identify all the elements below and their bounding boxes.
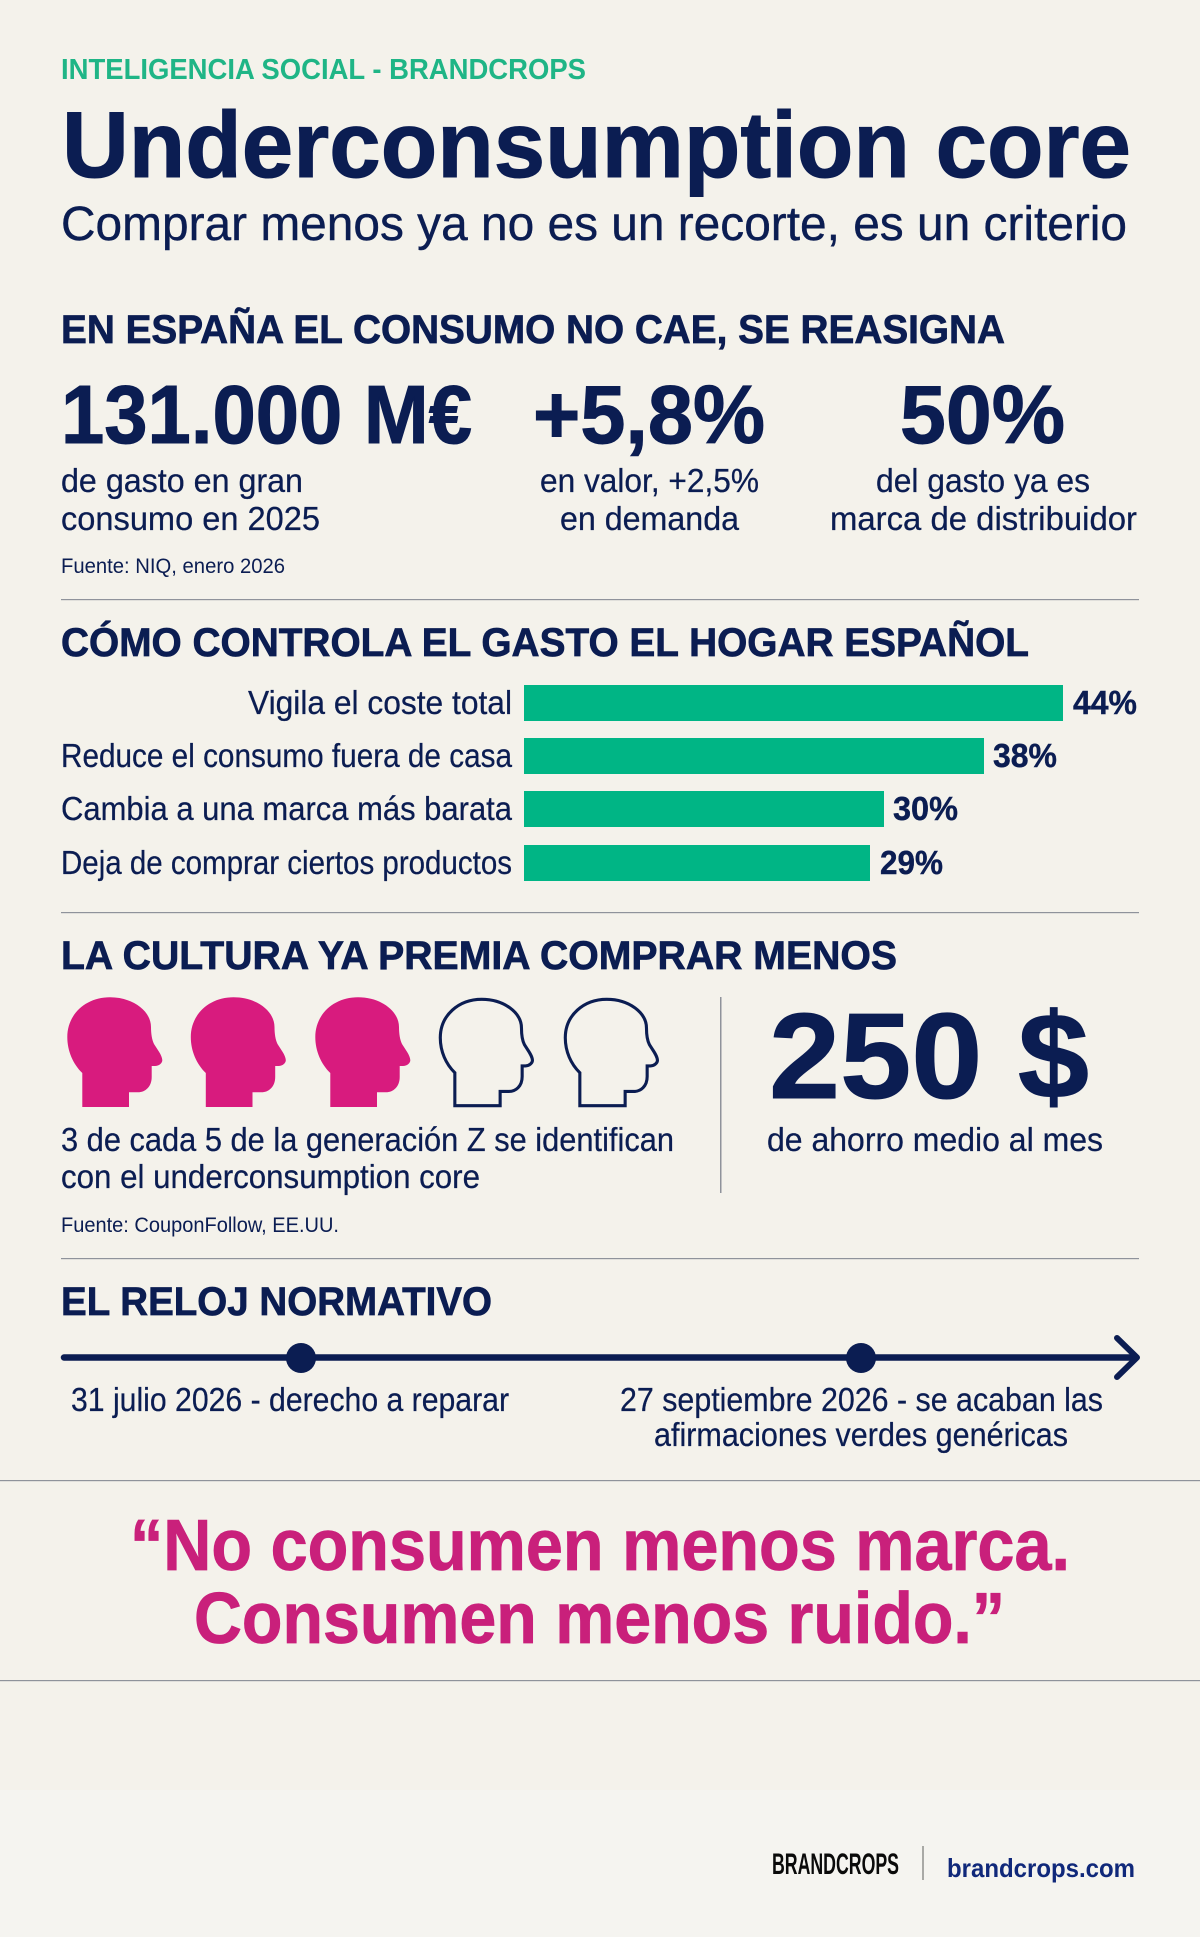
milestone: afirmaciones verdes: afirmaciones verdes genéricas bbox=[654, 1416, 1068, 1453]
icon: head outline 4 bbox=[440, 999, 532, 1106]
heading: control: CÓMO CONTROLA EL GASTO EL HOGAR ESPAÑOL bbox=[61, 619, 1029, 665]
bar: coste total: Vigila el coste total bbox=[248, 684, 512, 721]
eyebrow: INTELIGENCIA SOCIAL - BRANDCROPS bbox=[61, 54, 586, 86]
stat: valor: en demanda bbox=[560, 500, 740, 537]
bar: fuera de casa: 38% bbox=[993, 737, 1057, 774]
source: NIQ: Fuente: NIQ, enero 2026 bbox=[61, 555, 285, 578]
logo: BRANDCROPS bbox=[772, 1848, 899, 1881]
icon: head filled 3 bbox=[315, 997, 410, 1107]
bar chart bbox=[61, 684, 1137, 881]
stat: marca de distribuidor bbox=[830, 368, 1137, 537]
milestone: afirmaciones verdes: 27 septiembre 2026 - se acaban las bbox=[620, 1381, 1103, 1418]
bar: fuera de casa bbox=[61, 737, 1057, 774]
stat: valor: en valor, +2,5% bbox=[540, 462, 759, 499]
bar: dejar productos: 29% bbox=[880, 844, 943, 881]
bar: fuera de casa: Reduce el consumo fuera de casa bbox=[61, 737, 513, 774]
bar: marca más barata: 30% bbox=[893, 790, 958, 827]
icon: head outline 5 bbox=[565, 999, 657, 1106]
website: brandcrops.com bbox=[947, 1853, 1135, 1883]
stat: gasto: de gasto en gran bbox=[61, 462, 303, 499]
subtitle: Comprar menos ya no es un recorte, es un criterio bbox=[61, 198, 1127, 251]
panel: consumo en España bbox=[61, 306, 1137, 578]
footer bbox=[772, 1846, 1135, 1883]
milestone: derecho a reparar: 31 julio 2026 - derecho a reparar bbox=[71, 1381, 509, 1418]
heading: reloj: EL RELOJ NORMATIVO bbox=[61, 1280, 492, 1324]
stat: marca de distribuidor: del gasto ya es bbox=[876, 462, 1090, 499]
milestone: afirmaciones verdes bbox=[620, 1381, 1103, 1453]
panel: cultura bbox=[61, 934, 1103, 1237]
stat: valor: +5,8% bbox=[533, 368, 765, 461]
bar: dejar productos bbox=[61, 844, 943, 881]
icon: head filled 2 bbox=[191, 997, 286, 1107]
stat: valor bbox=[533, 368, 765, 537]
stat: marca de distribuidor: marca de distribuidor bbox=[830, 500, 1137, 537]
heading: cultura: LA CULTURA YA PREMIA COMPRAR MENOS bbox=[61, 934, 897, 978]
bar: marca más barata bbox=[61, 790, 958, 827]
heading: consumo: EN ESPAÑA EL CONSUMO NO CAE, SE REASIGNA bbox=[61, 306, 1005, 352]
bar: coste total: 44% bbox=[1073, 684, 1137, 721]
quote: Consumen menos ruido.” bbox=[194, 1579, 1005, 1659]
quote bbox=[130, 1506, 1070, 1659]
bar: coste total bbox=[248, 684, 1137, 721]
stat: gasto: 131.000 M€ bbox=[61, 368, 472, 461]
text: generación Z bbox=[61, 1121, 674, 1195]
text: generación Z: 3 de cada 5 de la generación Z se identifican bbox=[61, 1121, 674, 1158]
stat: marca de distribuidor: 50% bbox=[900, 368, 1065, 461]
quote: “No consumen menos marca. bbox=[130, 1506, 1070, 1586]
stat: ahorro: de ahorro medio al mes bbox=[767, 1121, 1103, 1158]
stat: gasto: consumo en 2025 bbox=[61, 500, 320, 537]
timeline arrow bbox=[64, 1338, 1137, 1377]
panel: control del gasto bbox=[61, 619, 1137, 881]
icons: cinco cabezas bbox=[67, 997, 657, 1107]
stat: ahorro: 250 $ bbox=[769, 988, 1089, 1124]
title: Underconsumption core bbox=[62, 92, 1131, 197]
text: generación Z: con el underconsumption core bbox=[61, 1158, 480, 1195]
panel: reloj normativo bbox=[61, 1280, 1137, 1453]
bar: dejar productos: Deja de comprar ciertos productos bbox=[61, 844, 512, 881]
stat: gasto bbox=[61, 368, 472, 537]
icon: head filled 1 bbox=[67, 997, 162, 1107]
bar: marca más barata: Cambia a una marca más barata bbox=[61, 790, 513, 827]
source: CouponFollow: Fuente: CouponFollow, EE.UU. bbox=[61, 1214, 339, 1237]
